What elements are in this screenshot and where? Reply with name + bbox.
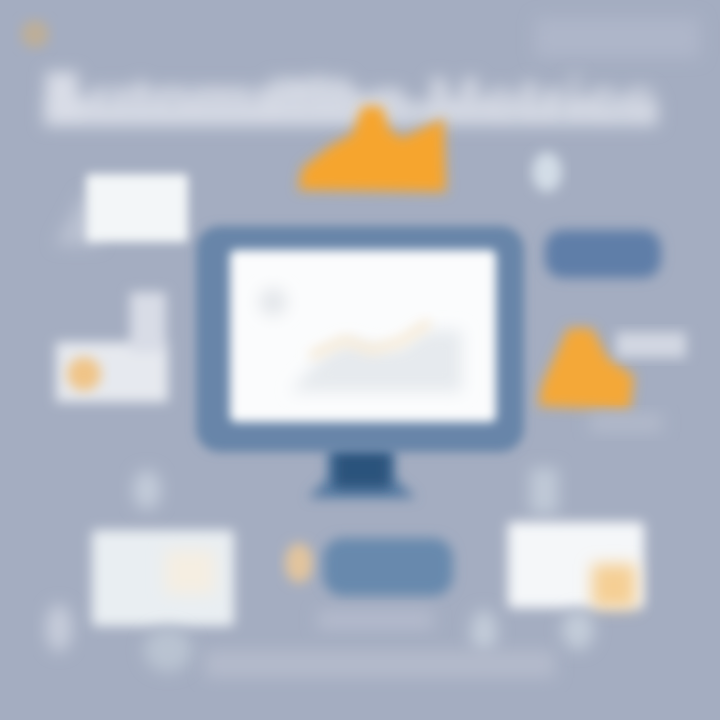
title: Automation Metrics [42, 64, 658, 136]
chart on screen [259, 288, 462, 392]
footer caption [205, 650, 555, 678]
monitor frame [196, 226, 524, 452]
icon: top-left badge [21, 20, 49, 48]
bottom-right small icons [471, 610, 594, 654]
panel: top-left card [55, 174, 188, 245]
monitor stand [308, 445, 416, 498]
panel: bottom-right card [508, 522, 644, 608]
monitor [196, 226, 524, 498]
icon: orange cloud chart [298, 106, 446, 192]
panel: middle-left bar chart card [56, 292, 168, 402]
monitor screen [230, 250, 496, 422]
icon: bottom-left marker [133, 470, 161, 510]
top-right caption [535, 18, 700, 58]
right label [616, 332, 686, 358]
panel: right blue pill [545, 230, 661, 278]
icon: small top-right marker [532, 152, 562, 192]
right caption [590, 414, 662, 432]
icon: marker above bottom-right card [530, 468, 558, 514]
icon: orange triangle [538, 328, 634, 410]
bottom-center caption [318, 610, 433, 630]
panel: bottom-left card [92, 530, 234, 672]
icon: lower-left marker [46, 604, 72, 652]
icon: orange dot [285, 543, 313, 583]
bottom-center blue pill [323, 538, 453, 596]
